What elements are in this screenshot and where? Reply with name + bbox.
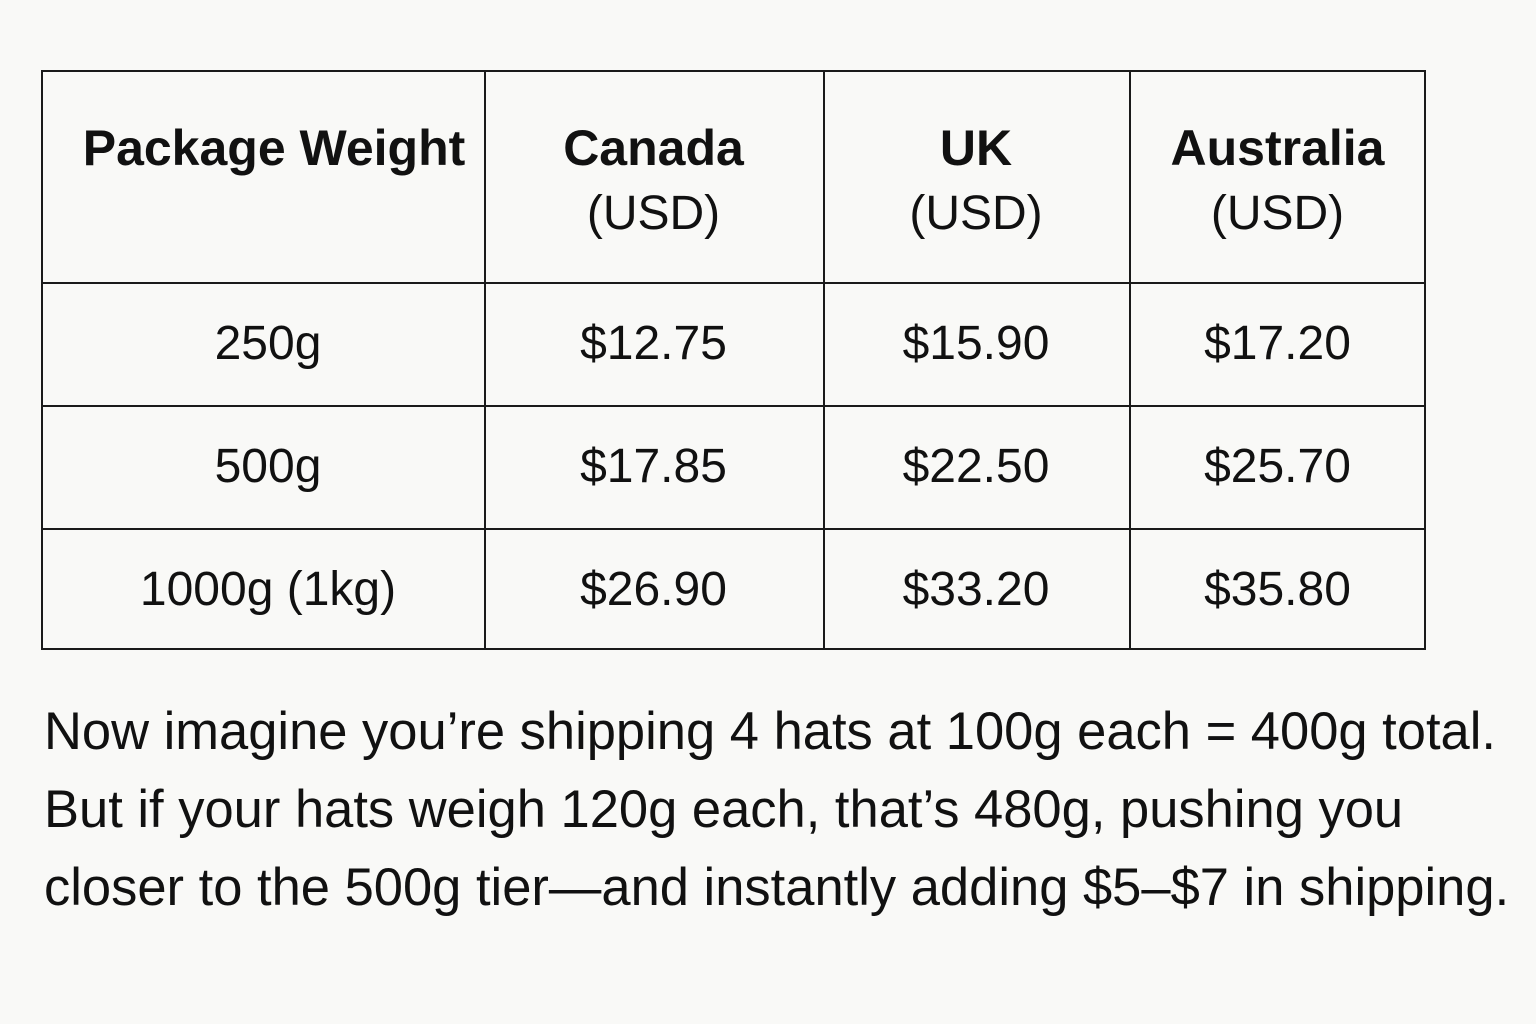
row 1000g: $35.80: [1204, 563, 1351, 616]
row 250g: 250g: [215, 317, 321, 370]
row 500g: $25.70: [1204, 440, 1351, 493]
row 250g: $15.90: [903, 317, 1049, 370]
paragraph: [44, 702, 1509, 917]
header: canada: (USD): [587, 187, 720, 240]
paragraph: But if your hats weigh 120g each, that’s 480g, pushing you: [44, 780, 1403, 839]
row 500g: $17.85: [580, 440, 727, 493]
row 1000g: 1000g (1kg): [140, 563, 396, 616]
table: [41, 70, 1426, 650]
header: uk: [909, 120, 1043, 240]
header: australia: Australia: [1171, 120, 1384, 176]
header: canada: Canada: [563, 120, 744, 176]
row 1000g: $33.20: [903, 563, 1049, 616]
header: australia: (USD): [1211, 187, 1344, 240]
row 250g: $17.20: [1204, 317, 1351, 370]
row 500g: $22.50: [903, 440, 1049, 493]
header: package weight: Package Weight: [83, 120, 465, 176]
header: canada: [563, 120, 744, 240]
header: australia: [1171, 120, 1385, 240]
paragraph: Now imagine you’re shipping 4 hats at 100g each = 400g total.: [44, 702, 1496, 761]
row 500g: [215, 440, 1351, 493]
header: uk: UK: [940, 120, 1012, 176]
row 1000g: $26.90: [580, 563, 727, 616]
row 500g: 500g: [215, 440, 321, 493]
row 250g: $12.75: [580, 317, 727, 370]
paragraph: closer to the 500g tier—and instantly adding $5–$7 in shipping.: [44, 858, 1509, 917]
header: uk: (USD): [909, 187, 1043, 240]
row 1000g: [140, 563, 1351, 616]
row 250g: [215, 317, 1351, 370]
